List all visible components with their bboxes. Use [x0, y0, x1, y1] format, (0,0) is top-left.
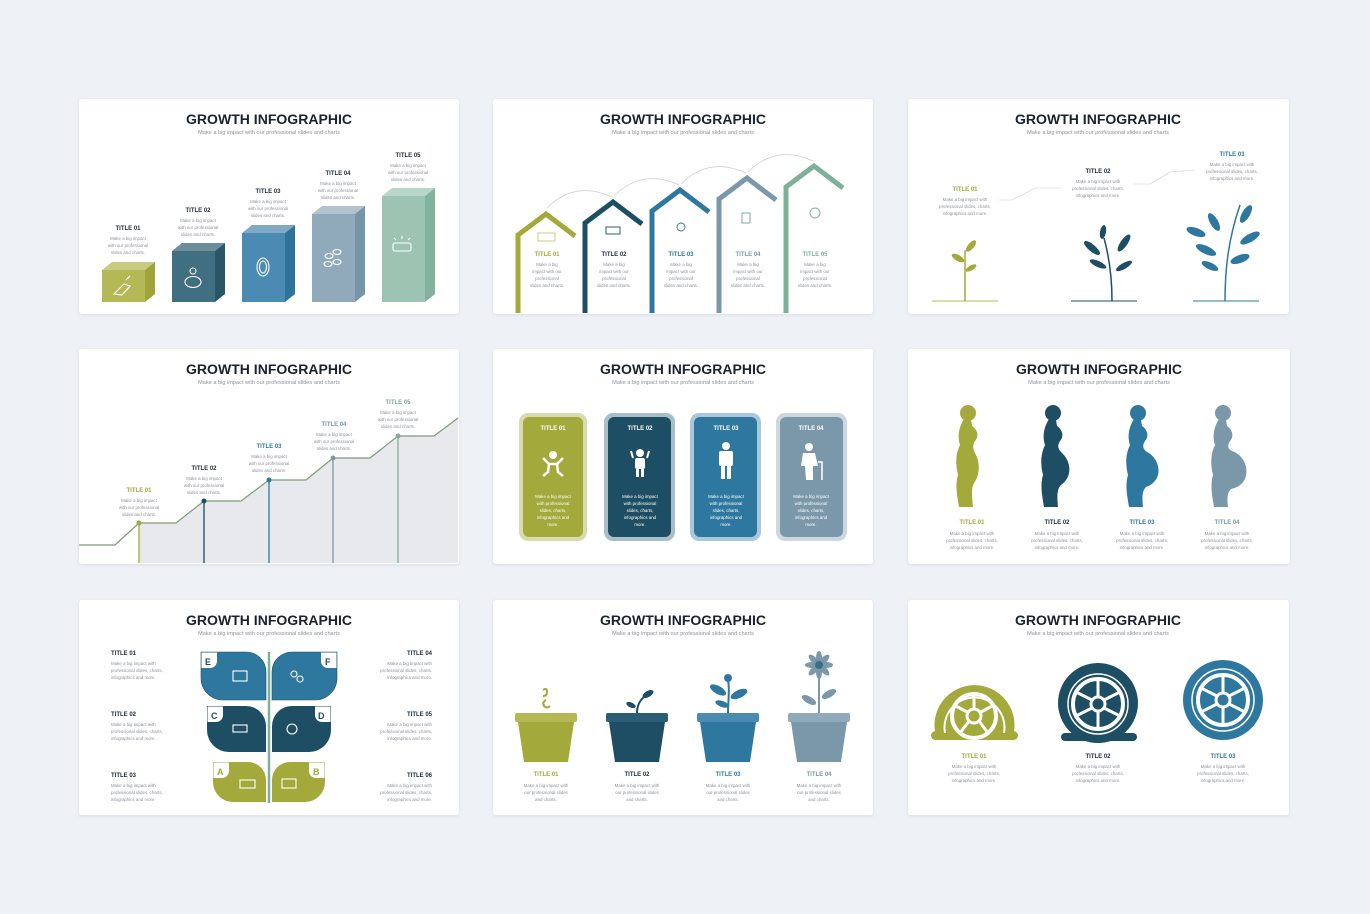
leaf F — [272, 652, 337, 700]
leaf D: D — [318, 711, 325, 721]
step 3 — [249, 444, 289, 563]
pot 1 seed: and charts. — [535, 797, 557, 802]
figure 2: professional slides, charts, — [1031, 538, 1083, 543]
pot 3 plant — [697, 674, 759, 802]
heading: GROWTH INFOGRAPHIC — [1015, 112, 1181, 127]
plant 2: TITLE 02 — [1085, 169, 1111, 175]
right texts: TITLE 05 — [407, 712, 433, 718]
bar 2: TITLE 02 — [185, 208, 211, 214]
tire 3 full: Make a big impact with — [1201, 764, 1246, 769]
house 4 — [719, 178, 776, 313]
tire 1 flat: Make a big impact with — [952, 764, 997, 769]
bar 5: TITLE 05 — [395, 153, 421, 159]
left texts: TITLE 03 — [111, 773, 137, 779]
figure 1: Make a big impact with — [950, 531, 995, 536]
subheading: Make a big impact with our professional slides and charts — [612, 380, 754, 386]
heading: GROWTH INFOGRAPHIC — [1015, 613, 1181, 628]
connectors — [999, 170, 1195, 200]
bar 4: with our professional — [318, 188, 358, 193]
stage 2 child — [604, 413, 675, 541]
subheading: Make a big impact with our professional slides and charts — [1027, 130, 1169, 136]
plant 1: infographics and more. — [943, 211, 987, 216]
panel: card 5 life stages — [493, 349, 873, 564]
pot 2 sprout: TITLE 02 — [624, 772, 650, 778]
bar 4: TITLE 04 — [325, 171, 351, 177]
plant 1: Make a big impact with — [943, 197, 988, 202]
right texts — [380, 651, 433, 802]
plant 1: TITLE 01 — [952, 187, 978, 193]
stage 2 child: TITLE 02 — [627, 426, 653, 432]
left texts: Make a big impact with — [111, 722, 156, 727]
house 2 — [585, 202, 642, 313]
house 2: professional — [602, 276, 626, 281]
panel: card 6 pregnancy — [908, 349, 1290, 564]
plant 2 — [1071, 169, 1137, 301]
stage 4 elder: Make a big impact — [793, 494, 830, 499]
step 5: TITLE 05 — [385, 400, 411, 406]
house 2: impact with our — [599, 269, 629, 274]
leaf E: E — [205, 657, 211, 667]
stage 1 baby: Make a big impact — [535, 494, 572, 499]
tire 3 full: infographics and more. — [1201, 778, 1245, 783]
right texts: professional slides, charts, — [380, 668, 432, 673]
right texts: professional slides, charts, — [380, 729, 432, 734]
figure 3: TITLE 03 — [1129, 520, 1155, 526]
panel: card 8 pots — [493, 600, 873, 815]
panel: card 1 bar growth — [79, 99, 459, 314]
step 3: TITLE 03 — [256, 444, 282, 450]
leaf D — [272, 706, 331, 752]
figure 1: TITLE 01 — [959, 520, 985, 526]
tire 1 flat: TITLE 01 — [961, 754, 987, 760]
pot 1 seed: TITLE 01 — [533, 772, 559, 778]
left texts: infographics and more. — [111, 675, 156, 680]
house 3: impact with our — [666, 269, 696, 274]
house 4: slides and charts. — [731, 283, 765, 288]
plant 3: Make a big impact with — [1210, 162, 1255, 167]
panel: card 9 tires — [908, 600, 1289, 815]
pot 1 seed: our professional slides — [524, 790, 569, 795]
step 4: with our professional — [314, 439, 354, 444]
step 5: Make a big impact — [380, 410, 417, 415]
left texts: professional slides, charts, — [111, 790, 163, 795]
right texts: Make a big impact with — [387, 783, 433, 788]
step 1: slides and charts. — [122, 512, 156, 517]
house 1: TITLE 01 — [534, 252, 560, 258]
leaf E — [201, 652, 266, 700]
bar 3: with our professional — [248, 206, 288, 211]
panel: card 2 arrow houses — [493, 99, 873, 314]
heading: GROWTH INFOGRAPHIC — [600, 112, 766, 127]
pot 2 sprout: and charts. — [626, 797, 648, 802]
pot 4 flower — [788, 651, 850, 802]
figure 1: professional slides, charts, — [946, 538, 998, 543]
step line — [79, 418, 458, 545]
bar 5 — [382, 153, 435, 302]
left texts: TITLE 01 — [111, 651, 137, 657]
pot 4 flower: TITLE 04 — [806, 772, 832, 778]
panel: card 7 leaf diagram — [79, 600, 459, 815]
house 5: slides and charts. — [798, 283, 832, 288]
stage 1 baby: more. — [547, 522, 559, 527]
figure 2: infographics and more. — [1035, 545, 1079, 550]
figure 4: infographics and more. — [1205, 545, 1249, 550]
right texts: Make a big impact with — [387, 661, 433, 666]
step 2: Make a big impact — [186, 476, 223, 481]
plant 3: professional slides, charts, — [1206, 169, 1258, 174]
house 5: professional — [803, 276, 827, 281]
house 4: professional — [736, 276, 760, 281]
pot 2 sprout: Make a big impact with — [615, 783, 660, 788]
house 3: professional — [669, 276, 693, 281]
house 4: TITLE 04 — [735, 252, 761, 258]
house 5 — [786, 166, 843, 313]
left texts — [111, 651, 163, 802]
tire 2 low: infographics and more. — [1076, 778, 1120, 783]
bar 3: TITLE 03 — [255, 189, 281, 195]
stage 4 elder — [776, 413, 847, 541]
pot 3 plant: TITLE 03 — [715, 772, 741, 778]
stage 3 adult: infographics and — [710, 515, 743, 520]
figure 4 — [1201, 405, 1253, 550]
panel: card 3 plants — [908, 99, 1289, 314]
stage 4 elder: slides, charts, — [798, 508, 824, 513]
pot 3 plant: our professional slides — [706, 790, 751, 795]
pot 2 sprout: our professional slides — [615, 790, 660, 795]
house 5: TITLE 05 — [802, 252, 828, 258]
stage 1 baby: with professional — [537, 501, 569, 506]
left texts: Make a big impact with — [111, 661, 156, 666]
left texts: Make a big impact with — [111, 783, 156, 788]
figure 2: TITLE 02 — [1044, 520, 1070, 526]
subheading: Make a big impact with our professional slides and charts — [1028, 380, 1170, 386]
plant 3: TITLE 03 — [1219, 152, 1245, 158]
step 1: with our professional — [119, 505, 159, 510]
stage 3 adult: slides, charts, — [713, 508, 739, 513]
step 2: slides and charts. — [187, 490, 221, 495]
step 1: TITLE 01 — [126, 488, 152, 494]
step 1 — [119, 488, 159, 563]
house 2: Make a big — [603, 262, 625, 267]
bar 4: Make a big impact — [320, 181, 357, 186]
figure 4: professional slides, charts, — [1201, 538, 1253, 543]
plant 3 — [1185, 152, 1262, 301]
house 3 — [652, 190, 709, 313]
step 5: slides and charts. — [381, 424, 415, 429]
subheading: Make a big impact with our professional slides and charts — [612, 130, 754, 136]
pot 3 plant: Make a big impact with — [706, 783, 751, 788]
bar 5: with our professional — [388, 170, 428, 175]
leaf B: B — [313, 767, 320, 777]
step 5: with our professional — [378, 417, 418, 422]
pot 4 flower: our professional slides — [797, 790, 842, 795]
left texts: professional slides, charts, — [111, 729, 163, 734]
right texts: infographics and more. — [387, 797, 432, 802]
stage 2 child: Make a big impact — [622, 494, 659, 499]
left texts: infographics and more. — [111, 797, 156, 802]
right texts: professional slides, charts, — [380, 790, 432, 795]
pot 4 flower: and charts. — [808, 797, 830, 802]
house 3: Make a big — [670, 262, 692, 267]
tire 1 flat: professional slides, charts, — [948, 771, 1000, 776]
pot 4 flower: Make a big impact with — [797, 783, 842, 788]
stage 1 baby: TITLE 01 — [540, 426, 566, 432]
figure 2 — [1031, 405, 1083, 550]
bar 3: Make a big impact — [250, 199, 287, 204]
pot 1 seed: Make a big impact with — [524, 783, 569, 788]
tire 1 flat — [931, 685, 1018, 783]
stage 4 elder: infographics and — [795, 515, 828, 520]
pot 3 plant: and charts. — [717, 797, 739, 802]
tire 2 low — [1058, 663, 1138, 783]
bar 5: slides and charts. — [391, 177, 425, 182]
figure 3: infographics and more. — [1120, 545, 1164, 550]
subheading: Make a big impact with our professional slides and charts — [612, 631, 754, 637]
step 4 — [314, 422, 354, 563]
step 3: Make a big impact — [251, 454, 288, 459]
leaf A — [213, 762, 266, 802]
stage 3 adult: more. — [720, 522, 732, 527]
stage 1 baby: slides, charts, — [540, 508, 566, 513]
tire 3 full: professional slides, charts, — [1197, 771, 1249, 776]
pot 2 sprout — [606, 688, 668, 802]
step 4: slides and charts. — [317, 446, 351, 451]
bar 2: slides and charts. — [181, 232, 215, 237]
left texts: professional slides, charts, — [111, 668, 163, 673]
heading: GROWTH INFOGRAPHIC — [1016, 362, 1182, 377]
figure 3: professional slides, charts, — [1116, 538, 1168, 543]
stage 4 elder: more. — [805, 522, 817, 527]
bar 3 — [242, 189, 295, 302]
stage 3 adult: Make a big impact — [708, 494, 745, 499]
stage 2 child: slides, charts, — [627, 508, 653, 513]
figure 1 — [946, 405, 998, 550]
panel: card 4 step line — [79, 349, 459, 564]
bar 3: slides and charts. — [251, 213, 285, 218]
house 3: slides and charts. — [664, 283, 698, 288]
step 2: TITLE 02 — [191, 466, 217, 472]
tire 2 low: TITLE 02 — [1085, 754, 1111, 760]
plant 1 — [932, 187, 998, 301]
house 3: TITLE 03 — [668, 252, 694, 258]
left texts: TITLE 02 — [111, 712, 137, 718]
figure 3: Make a big impact with — [1120, 531, 1165, 536]
bar 1 — [102, 226, 155, 302]
leaf A: A — [217, 767, 224, 777]
right texts: Make a big impact with — [387, 722, 433, 727]
step area — [139, 418, 458, 563]
step 3: slides and charts. — [252, 468, 286, 473]
arcs — [547, 155, 813, 208]
plant 2: infographics and more. — [1076, 193, 1120, 198]
step 4: TITLE 04 — [321, 422, 347, 428]
tire 3 full: TITLE 03 — [1210, 754, 1236, 760]
step 2: with our professional — [184, 483, 224, 488]
tire 2 low: Make a big impact with — [1076, 764, 1121, 769]
leaf C — [207, 706, 266, 752]
bar 1: with our professional — [108, 243, 148, 248]
leaf B — [272, 762, 325, 802]
bar 2: with our professional — [178, 225, 218, 230]
house 1 — [518, 214, 575, 313]
stage 2 child: infographics and — [624, 515, 657, 520]
stage 1 baby: infographics and — [537, 515, 570, 520]
figure 2: Make a big impact with — [1035, 531, 1080, 536]
step 2 — [184, 466, 224, 563]
plant 1: professional slides, charts, — [939, 204, 991, 209]
house 2: TITLE 02 — [601, 252, 627, 258]
bar 4: slides and charts. — [321, 195, 355, 200]
bar 2: Make a big impact — [180, 218, 217, 223]
house 4: impact with our — [733, 269, 763, 274]
house 1: impact with our — [532, 269, 562, 274]
bar 4 — [312, 171, 365, 302]
bar 5: Make a big impact — [390, 163, 427, 168]
stage 1 baby — [519, 413, 587, 541]
figure 3 — [1116, 405, 1168, 550]
stage 2 child: more. — [634, 522, 646, 527]
stage 2 child: with professional — [624, 501, 656, 506]
bar 1: slides and charts. — [111, 250, 145, 255]
stage 4 elder: TITLE 04 — [798, 426, 824, 432]
tire 2 low: professional slides, charts, — [1072, 771, 1124, 776]
leaf F: F — [325, 657, 331, 667]
house 5: Make a big — [804, 262, 826, 267]
bar 1: Make a big impact — [110, 236, 147, 241]
figure 4: TITLE 04 — [1214, 520, 1240, 526]
stage 3 adult — [690, 413, 761, 541]
left texts: infographics and more. — [111, 736, 156, 741]
step 4: Make a big impact — [316, 432, 353, 437]
pot 1 seed — [515, 689, 577, 802]
heading: GROWTH INFOGRAPHIC — [600, 362, 766, 377]
plant 2: Make a big impact with — [1076, 179, 1121, 184]
right texts: TITLE 06 — [407, 773, 433, 779]
house 1: Make a big — [536, 262, 558, 267]
house 4: Make a big — [737, 262, 759, 267]
right texts: infographics and more. — [387, 675, 432, 680]
subheading: Make a big impact with our professional slides and charts — [1027, 631, 1169, 637]
heading: GROWTH INFOGRAPHIC — [186, 613, 352, 628]
stage 4 elder: with professional — [795, 501, 827, 506]
subheading: Make a big impact with our professional slides and charts — [198, 130, 340, 136]
figure 1: infographics and more. — [950, 545, 994, 550]
heading: GROWTH INFOGRAPHIC — [600, 613, 766, 628]
tire 3 full — [1183, 660, 1263, 783]
tire 1 flat: infographics and more. — [952, 778, 996, 783]
house 1: slides and charts. — [530, 283, 564, 288]
leaf C: C — [211, 711, 218, 721]
step 3: with our professional — [249, 461, 289, 466]
subheading: Make a big impact with our professional slides and charts — [198, 380, 340, 386]
bar 1: TITLE 01 — [115, 226, 141, 232]
house 1: professional — [535, 276, 559, 281]
stage 3 adult: TITLE 03 — [713, 426, 739, 432]
heading: GROWTH INFOGRAPHIC — [186, 112, 352, 127]
step 1: Make a big impact — [121, 498, 158, 503]
right texts: infographics and more. — [387, 736, 432, 741]
house 5: impact with our — [800, 269, 830, 274]
plant 2: professional slides, charts, — [1072, 186, 1124, 191]
right texts: TITLE 04 — [407, 651, 433, 657]
bar 2 — [172, 208, 225, 302]
house 2: slides and charts. — [597, 283, 631, 288]
heading: GROWTH INFOGRAPHIC — [186, 362, 352, 377]
stem — [268, 652, 270, 803]
plant 3: infographics and more. — [1210, 176, 1254, 181]
step 5 — [378, 400, 418, 563]
stage 3 adult: with professional — [710, 501, 742, 506]
subheading: Make a big impact with our professional slides and charts — [198, 631, 340, 637]
figure 4: Make a big impact with — [1205, 531, 1250, 536]
